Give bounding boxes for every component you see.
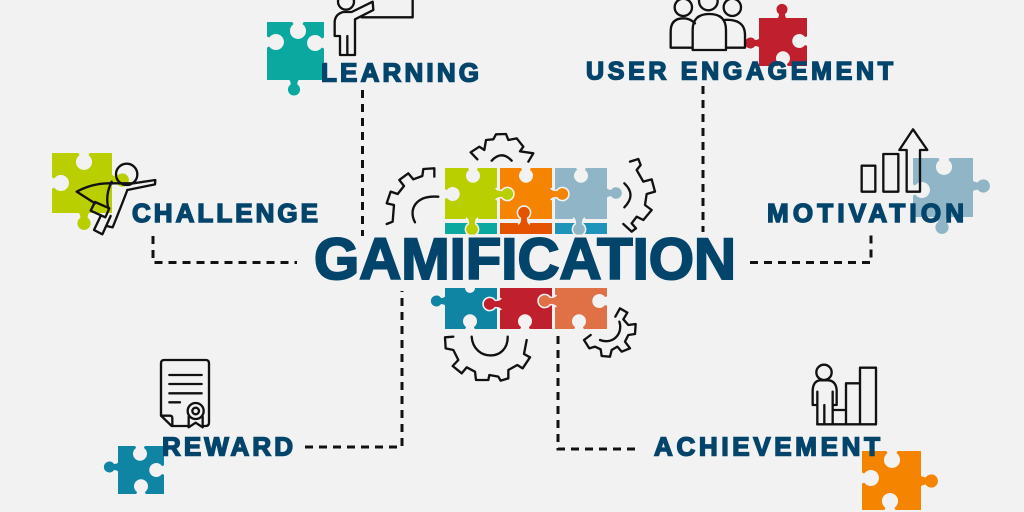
connector: motivation xyxy=(750,230,871,262)
puzzle piece: green (challenge) xyxy=(51,152,129,230)
connector: challenge xyxy=(153,236,297,262)
central puzzle: top row xyxy=(444,167,622,238)
label: user engagement: USER ENGAGEMENT xyxy=(586,58,893,86)
icon: bars and up arrow xyxy=(862,129,927,192)
central puzzle: bottom row xyxy=(431,283,608,330)
connector: reward xyxy=(305,291,402,447)
strip under green piece xyxy=(445,223,497,234)
red piece xyxy=(483,288,552,330)
puzzle piece: blue-grey (motivation) xyxy=(912,157,990,234)
strip under orange piece xyxy=(500,223,552,234)
icon: certificate xyxy=(161,360,209,427)
puzzle piece: teal-blue (reward) xyxy=(104,445,165,495)
green piece xyxy=(444,167,497,236)
icon: person beside rising steps xyxy=(813,365,876,424)
teal-blue piece xyxy=(431,283,497,330)
label: challenge: CHALLENGE xyxy=(132,198,318,228)
icon: group of people xyxy=(671,0,745,50)
puzzle piece: teal (learning) xyxy=(266,21,325,96)
central gears xyxy=(387,134,655,381)
label: achievement: ACHIEVEMENT xyxy=(654,432,880,462)
puzzle piece: orange (achievement) xyxy=(861,450,938,511)
strip under blue-grey piece xyxy=(555,223,607,234)
icon: teacher at board xyxy=(335,0,413,55)
orange piece xyxy=(496,167,552,224)
blue-grey piece xyxy=(551,167,622,236)
connector: user engagement xyxy=(702,86,704,232)
title: GAMIFICATION xyxy=(314,227,736,292)
label: motivation: MOTIVATION xyxy=(767,198,964,228)
connector: learning xyxy=(361,90,364,236)
label: reward: REWARD xyxy=(162,432,293,462)
label: learning: LEARNING xyxy=(321,58,479,88)
connector: achievement xyxy=(558,336,637,449)
puzzle piece: red (user engagement) xyxy=(745,4,808,67)
coral piece xyxy=(538,288,608,330)
icon: flying hero with briefcase xyxy=(77,164,155,234)
